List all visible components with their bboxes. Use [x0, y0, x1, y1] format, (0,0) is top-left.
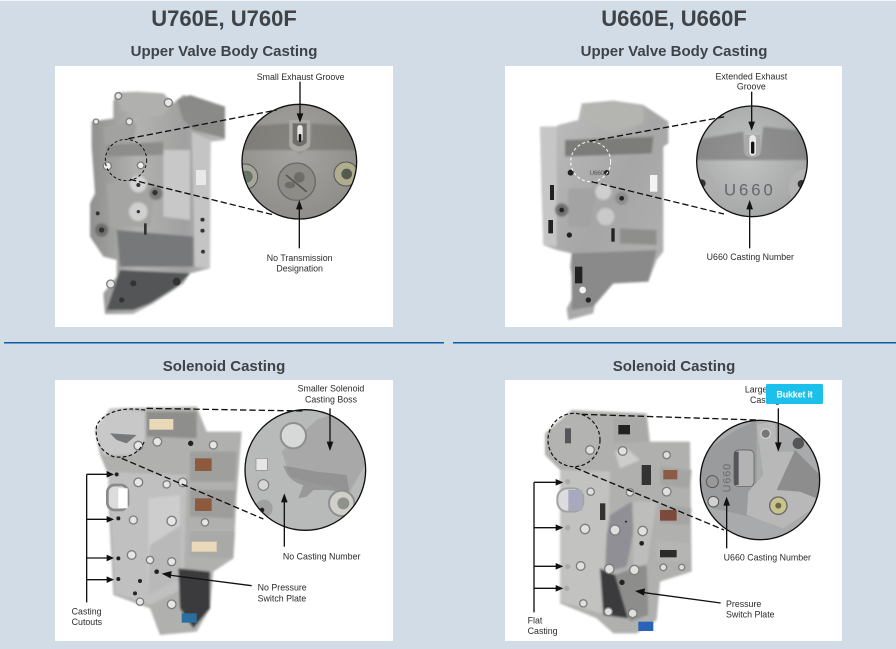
cast marking: U660	[722, 463, 734, 492]
cast marking: U660	[724, 181, 776, 200]
label: larger solenoid casting boss: Casting Boss	[750, 395, 803, 405]
dashed zoom guide	[571, 117, 725, 214]
magnifier detail circle	[232, 104, 360, 219]
label: no pressure switch plate: Switch Plate	[258, 593, 306, 603]
arrow: pressure switch plate	[635, 588, 721, 603]
label: flat casting: Flat	[528, 615, 542, 625]
valve body photo	[90, 92, 225, 314]
dashed zoom guide	[96, 408, 303, 519]
arrows: casting cutouts	[87, 471, 114, 602]
solenoid body photo	[95, 407, 242, 635]
heading: U660E, U660F: U660E, U660F	[601, 6, 747, 31]
arrows: flat casting	[534, 479, 563, 612]
subheading: solenoid casting left: Solenoid Casting	[163, 358, 285, 375]
label: U660 casting number: U660 Casting Number	[707, 252, 794, 262]
arrow: larger solenoid casting boss	[775, 408, 782, 452]
panel: U660 solenoid casting	[505, 380, 842, 641]
button: Bukket it	[766, 384, 823, 404]
label: flat casting: Casting	[528, 626, 558, 636]
solenoid body photo	[545, 410, 692, 633]
label: casting cutouts: Casting	[72, 606, 102, 616]
dashed zoom guide	[105, 110, 277, 215]
panel: U760 solenoid casting	[55, 380, 393, 641]
label: smaller solenoid casting boss: Casting Boss	[305, 394, 358, 404]
subheading: solenoid casting right: Solenoid Casting	[613, 358, 735, 375]
subheading: upper valve body casting right: Upper Valve Body Casting	[581, 43, 767, 60]
button: Bukket it: Bukket it	[776, 390, 813, 400]
arrow: small exhaust groove	[297, 82, 303, 123]
label: no pressure switch plate: No Pressure	[258, 583, 307, 593]
label: extended exhaust groove: Groove	[737, 81, 766, 91]
label: larger solenoid casting boss: Larger Solenoid	[745, 385, 807, 395]
label: no transmission designation: Designation	[276, 264, 323, 274]
label: small exhaust groove: Small Exhaust Groove	[257, 72, 345, 82]
arrow: U660 casting number	[746, 200, 753, 248]
magnifier detail circle	[700, 420, 820, 540]
valve body photo	[540, 101, 668, 320]
arrow: smaller solenoid casting boss	[327, 408, 333, 451]
label: smaller solenoid casting boss: Smaller Solenoid	[298, 384, 364, 394]
arrow: extended exhaust groove	[748, 92, 755, 131]
arrow: U660 casting number	[723, 497, 730, 548]
panel: U660 upper valve body	[505, 66, 842, 327]
label: no casting number: No Casting Number	[283, 551, 360, 561]
heading: U760E, U760F: U760E, U760F	[151, 6, 297, 31]
arrow: no casting number	[281, 493, 288, 547]
arrow: no transmission designation	[296, 200, 303, 248]
arrow: no pressure switch plate	[162, 571, 252, 586]
panel: U760 upper valve body	[55, 66, 393, 327]
cast marking: U660	[589, 170, 605, 177]
dashed zoom guide	[548, 413, 757, 530]
subheading: upper valve body casting left: Upper Valve Body Casting	[131, 43, 317, 60]
label: U660 casting number: U660 Casting Number	[724, 553, 811, 563]
label: pressure switch plate: Pressure	[726, 599, 761, 609]
label: no transmission designation: No Transmission	[267, 253, 333, 263]
label: extended exhaust groove: Extended Exhaust	[716, 71, 787, 81]
magnifier detail circle	[695, 106, 808, 217]
magnifier detail circle	[245, 408, 367, 530]
label: pressure switch plate: Switch Plate	[726, 610, 775, 620]
label: casting cutouts: Cutouts	[72, 617, 103, 627]
